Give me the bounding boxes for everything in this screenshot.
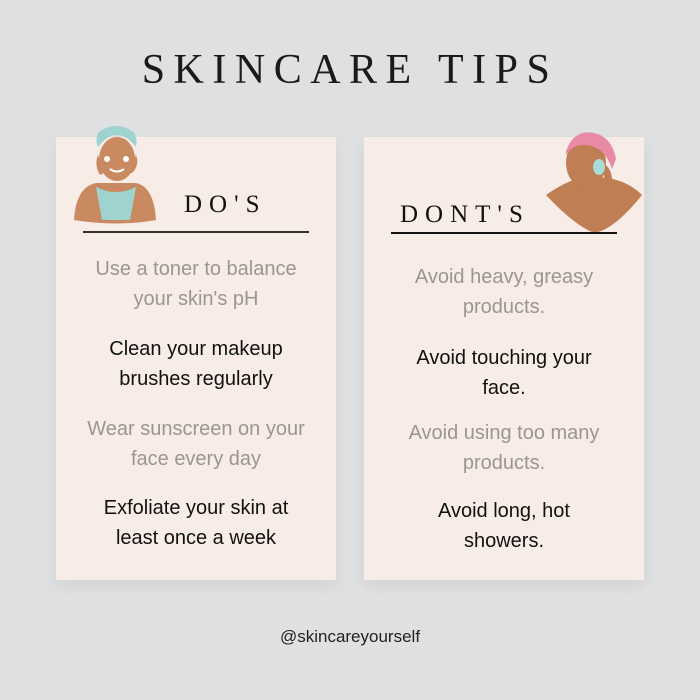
tip 1: Avoid heavy, greasy xyxy=(415,266,593,288)
tip 1 xyxy=(415,266,593,318)
tip 4 xyxy=(104,497,288,549)
icon: woman washing face xyxy=(74,126,156,224)
panel: dont's xyxy=(364,137,644,580)
tip 3 xyxy=(87,418,305,470)
tip 2: face. xyxy=(482,377,526,399)
panel: do's xyxy=(56,137,336,580)
tip 3: products. xyxy=(463,452,545,474)
tip 2: Clean your makeup xyxy=(109,338,283,360)
heading: do's: DO'S xyxy=(184,191,267,218)
tip 4: least once a week xyxy=(116,527,276,549)
tip 4: showers. xyxy=(464,530,544,552)
tip 1: Use a toner to balance xyxy=(95,258,297,280)
tip 4: Avoid long, hot xyxy=(438,500,570,522)
heading: dont's: DONT'S xyxy=(400,201,530,228)
tip 3: Avoid using too many xyxy=(409,422,599,444)
divider line xyxy=(83,231,309,232)
tip 1: products. xyxy=(463,296,545,318)
footer handle: @skincareyourself xyxy=(280,627,420,646)
tip 3 xyxy=(408,422,600,474)
tip 3: face every day xyxy=(131,448,261,470)
divider line xyxy=(391,232,617,234)
tip 4 xyxy=(438,500,570,552)
title: SKINCARE TIPS xyxy=(142,47,558,93)
tip 2: brushes regularly xyxy=(119,368,273,390)
tip 2 xyxy=(109,338,283,390)
tip 2 xyxy=(416,347,592,399)
tip 4: Exfoliate your skin at xyxy=(104,497,288,519)
tip 3: Wear sunscreen on your xyxy=(87,418,305,440)
tip 2: Avoid touching your xyxy=(416,347,592,369)
icon: man with face pad xyxy=(546,132,642,232)
tip 1 xyxy=(95,258,297,310)
tip 1: your skin's pH xyxy=(134,288,258,310)
